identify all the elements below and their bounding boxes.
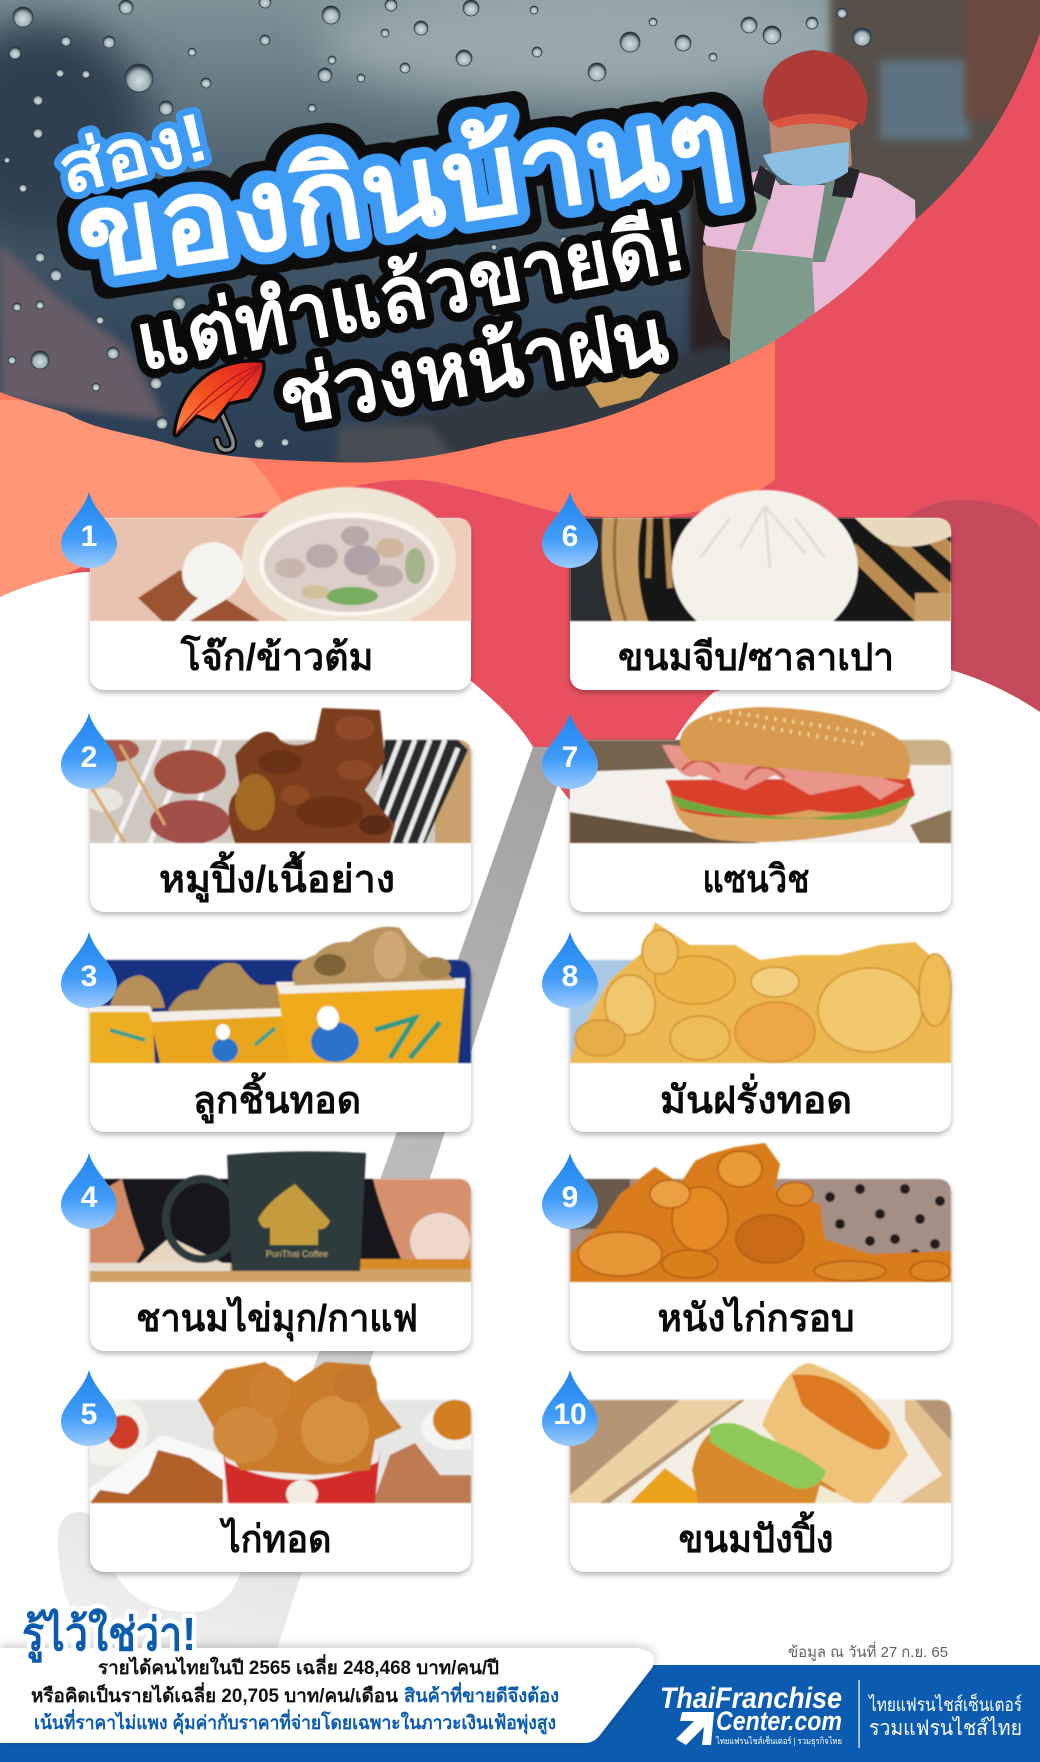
droplet number 7	[542, 713, 598, 789]
card body	[90, 960, 471, 1132]
card 9: หนังไก่กรอบ	[542, 1143, 951, 1351]
photo: toast with custard	[570, 1363, 951, 1503]
card 2: หมูปิ้ง/เนื้อย่าง	[61, 708, 471, 912]
card body	[570, 1179, 951, 1351]
logo: ThaiFranchise Center.com: ไทยแฟรนไชส์เซ็นเตอร์ | รวมธุรกิจไทย	[715, 1734, 842, 1747]
title line: ของกินบ้านๆ: ของกินบ้านๆ	[68, 74, 740, 303]
droplet number 10: 10	[553, 1398, 587, 1431]
card 6: ขนมจีบ/ซาลาเปา	[542, 490, 951, 690]
photo: grilled skewers	[87, 708, 471, 844]
logo: ThaiFranchise Center.com: ThaiFranchise	[660, 1682, 842, 1715]
card 7: แซนวิช	[542, 707, 951, 912]
footer blue band	[0, 1665, 1040, 1762]
droplet number 6: 6	[562, 520, 578, 553]
droplet number 4	[61, 1153, 117, 1229]
droplet number 4: 4	[81, 1181, 98, 1214]
data date note: ข้อมูล ณ วันที่ 27 ก.ย. 65	[788, 1641, 948, 1661]
droplet number 7: 7	[562, 741, 578, 774]
photo: ham sandwich	[570, 707, 951, 843]
footer info panel	[0, 1648, 654, 1743]
droplet number 6	[542, 492, 598, 568]
photo: coffee mug	[90, 1151, 471, 1282]
card body	[570, 1400, 951, 1572]
raindrops	[4, 0, 871, 448]
label: ลูกชิ้นทอด	[193, 1072, 361, 1124]
label: ชานมไข่มุก/กาแฟ	[136, 1296, 418, 1342]
footer text line 3: เน้นที่ราคาไม่แพง คุ้มค่ากับราคาที่จ่ายโดยเฉพาะในภาวะเงินเฟ้อพุ่งสูง	[34, 1709, 556, 1735]
diagonal check mark watermark	[58, 747, 570, 1655]
droplet number 1: 1	[81, 520, 97, 553]
logo: ThaiFranchise Center.com: Center.com	[716, 1706, 842, 1736]
label: แซนวิช	[702, 859, 810, 901]
card body	[90, 1400, 471, 1572]
title line: ช่วงหน้าฝน: ช่วงหน้าฝน	[273, 292, 674, 442]
droplet number 2: 2	[81, 741, 97, 774]
card 3: ลูกชิ้นทอด	[61, 927, 471, 1132]
photo: potato chips	[570, 922, 951, 1063]
footer text line 2 black: หรือคิดเป็นรายได้เฉลี่ย 20,705 บาท/คน/เดือน	[31, 1682, 398, 1707]
droplet number 3: 3	[81, 960, 97, 993]
droplet number 8	[542, 932, 598, 1008]
droplet number 5	[61, 1370, 117, 1446]
label: หมูปิ้ง/เนื้อย่าง	[159, 851, 395, 903]
droplet number 3	[61, 932, 117, 1008]
woman vendor	[702, 50, 916, 364]
droplet number 2	[61, 713, 117, 789]
card body	[570, 960, 951, 1132]
title line: แต่ทำแล้วขายดี!: แต่ทำแล้วขายดี!	[129, 199, 692, 387]
card body	[90, 1179, 471, 1351]
label: ไก่ทอด	[219, 1517, 332, 1561]
card 10: ขนมปังปิ้ง	[542, 1363, 951, 1572]
footer text line 1: รายได้คนไทยในปี 2565 เฉลี่ย 248,468 บาท/คน/ปี	[98, 1654, 499, 1679]
photo: coffee mug: PunThai Coffee	[266, 1249, 328, 1259]
brand tagline	[867, 1692, 1022, 1740]
label: ขนมจีบ/ซาลาเปา	[618, 637, 894, 679]
photo: crispy chicken skin	[570, 1143, 951, 1282]
droplet number 8: 8	[562, 960, 578, 993]
label: โจ๊ก/ข้าวต้ม	[180, 634, 374, 679]
title	[51, 74, 740, 442]
card body	[570, 740, 951, 912]
footer	[0, 1607, 1040, 1762]
droplet number 9	[542, 1153, 598, 1229]
photo: steamed bun	[569, 489, 952, 622]
grill stall	[332, 344, 742, 462]
divider	[858, 1680, 860, 1748]
logo: ThaiFranchise Center.com	[660, 1682, 842, 1747]
icon: logo arrow	[676, 1712, 714, 1745]
heading: รู้ไว้ใช่ว่า!: รู้ไว้ใช่ว่า!	[22, 1607, 196, 1663]
card body	[570, 518, 951, 690]
card 4: ชานมไข่มุก/กาแฟ	[61, 1151, 471, 1351]
droplet number 1	[61, 492, 117, 568]
brand tagline: รวมแฟรนไชส์ไทย	[869, 1716, 1022, 1740]
label: ขนมปังปิ้ง	[678, 1511, 834, 1561]
header photo: woman vendor behind rainy window	[0, 0, 1040, 480]
card body	[90, 518, 471, 690]
icon: umbrella	[176, 362, 262, 450]
droplet number 5: 5	[81, 1398, 97, 1431]
card 5: ไก่ทอด	[61, 1362, 489, 1572]
photo: fried chicken bucket	[90, 1361, 472, 1504]
card 8: มันฝรั่งทอด	[542, 922, 951, 1132]
label: หนังไก่กรอบ	[658, 1296, 854, 1340]
footer text line 2 blue: สินค้าที่ขายดีจึงต้อง	[404, 1682, 559, 1707]
photo: fried fish balls in cups	[90, 927, 471, 1063]
card 1: โจ๊ก/ข้าวต้ม	[61, 487, 471, 690]
title line: ส่อง!: ส่อง!	[51, 99, 215, 209]
droplet number 9: 9	[562, 1181, 578, 1214]
photo: rice porridge bowl	[90, 487, 471, 633]
droplet number 10	[542, 1370, 598, 1446]
photo backdrop	[0, 0, 1040, 480]
card body	[90, 740, 471, 912]
label: มันฝรั่งทอด	[660, 1073, 852, 1122]
